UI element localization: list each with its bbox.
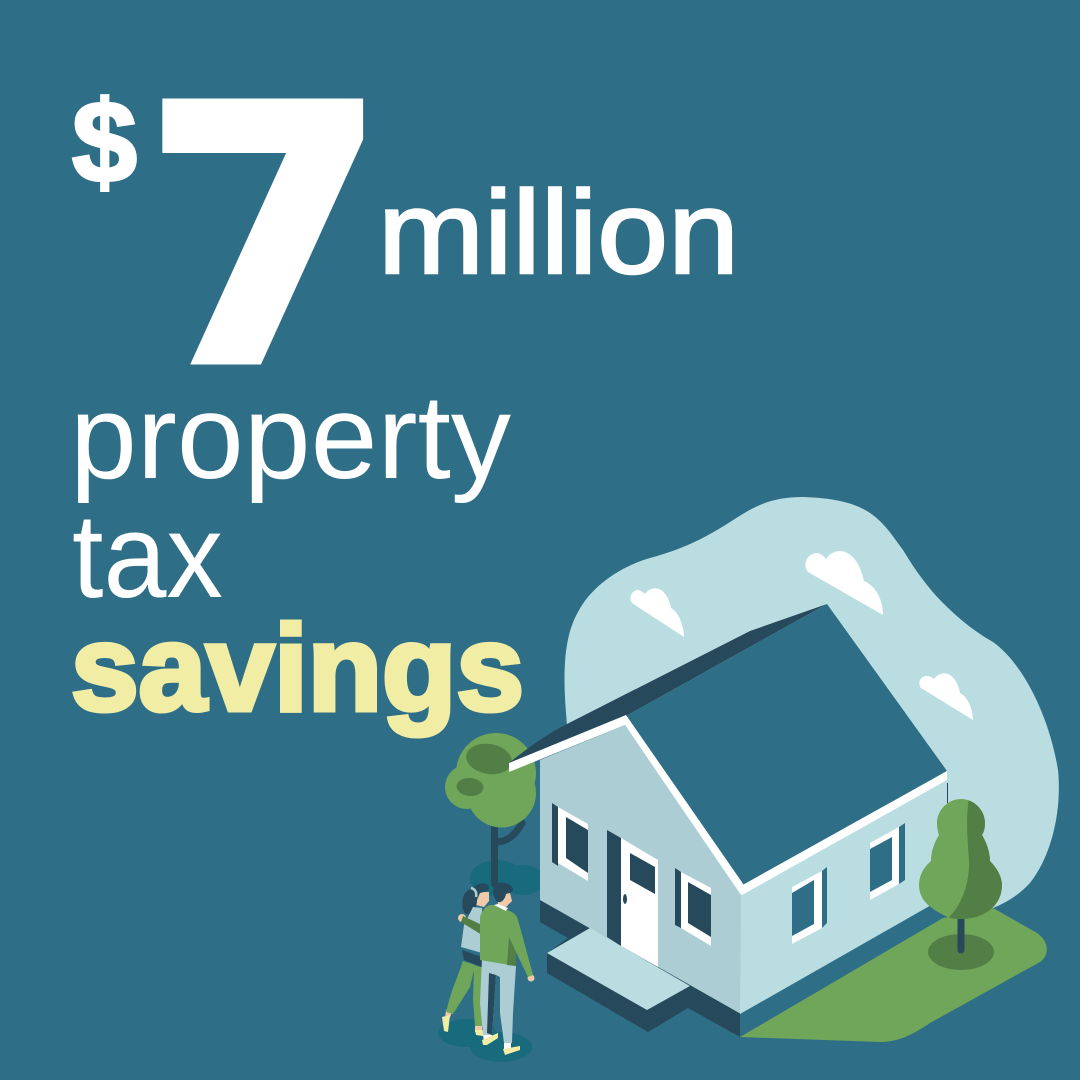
man hair xyxy=(493,883,513,902)
tree shadow xyxy=(928,934,994,970)
front window: right xyxy=(675,868,711,946)
word: million: million xyxy=(378,167,739,299)
foliage shading xyxy=(949,800,1002,919)
tree trunk xyxy=(494,823,522,884)
roof shadow sliver xyxy=(509,604,827,763)
man sweater xyxy=(480,905,533,977)
tree: right xyxy=(919,798,1010,970)
porch step xyxy=(547,928,690,1010)
tree foliage xyxy=(445,733,536,828)
cloud: right xyxy=(919,673,973,720)
highlighted word: savings: savings xyxy=(71,600,524,736)
front window: left xyxy=(552,803,588,881)
tree trunk xyxy=(958,915,964,950)
word: property: property xyxy=(70,370,511,504)
large numeral 7: 7 xyxy=(141,31,389,447)
man skin xyxy=(497,893,512,907)
subheading: property tax xyxy=(70,370,511,623)
woman top xyxy=(461,907,482,953)
woman xyxy=(442,883,489,1036)
man shoes xyxy=(482,1033,520,1055)
ground shadows xyxy=(438,1019,532,1062)
side wall xyxy=(740,776,947,1014)
woman legs xyxy=(446,961,484,1026)
word: tax: tax xyxy=(72,489,223,623)
woman hairband xyxy=(471,888,476,897)
foundation xyxy=(540,898,740,1037)
woman skin xyxy=(445,892,489,1032)
side window: right xyxy=(870,823,905,900)
man xyxy=(458,883,534,1055)
dollar sign: $ xyxy=(72,77,137,207)
cloud: top xyxy=(805,551,883,615)
woman shoes xyxy=(442,1015,483,1036)
gable front wall xyxy=(540,725,741,1014)
tree: left xyxy=(445,733,545,896)
sweater collar xyxy=(494,904,508,911)
grass lawn xyxy=(740,908,1047,1042)
headline: $7 million xyxy=(72,31,739,447)
man arm xyxy=(461,916,482,935)
illustration: house scene xyxy=(438,497,1059,1062)
cloud: left xyxy=(630,588,684,637)
front door xyxy=(607,830,658,967)
woman hair xyxy=(462,883,489,914)
foliage shading xyxy=(456,740,514,797)
tree shadow xyxy=(470,860,545,896)
tree foliage xyxy=(919,799,1002,919)
roof xyxy=(626,604,947,888)
wall corner line xyxy=(946,783,948,803)
left hand xyxy=(458,914,466,922)
man socks xyxy=(483,1035,511,1050)
side eave trim xyxy=(739,771,947,895)
right hand xyxy=(528,974,534,982)
side window: left xyxy=(792,867,827,944)
man pants xyxy=(480,958,516,1043)
people: couple xyxy=(438,883,534,1062)
sweater fold xyxy=(507,937,516,966)
sky blob xyxy=(564,497,1059,908)
woman waistband xyxy=(462,950,482,967)
front eave trim xyxy=(509,715,746,895)
pants shadow xyxy=(487,973,496,1035)
house xyxy=(509,604,948,1037)
